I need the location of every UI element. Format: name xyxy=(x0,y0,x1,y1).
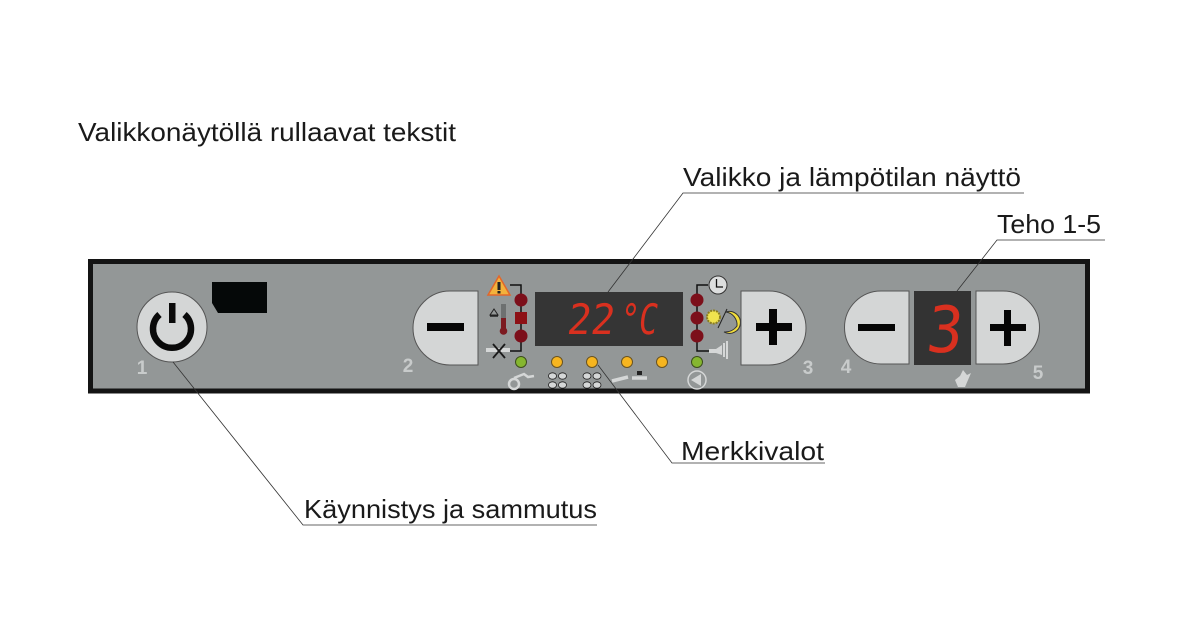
temperature display: 22 xyxy=(565,295,618,344)
icon: fan 1 xyxy=(548,373,566,388)
icon: sun and moon xyxy=(707,309,740,333)
button numbers: 1 xyxy=(137,358,148,379)
black indicator window xyxy=(212,282,267,313)
callout: indicator lights xyxy=(598,365,825,466)
callout: indicator lights: Merkkivalot xyxy=(681,436,825,466)
control panel xyxy=(90,262,1088,391)
button numbers: 3 xyxy=(803,358,813,379)
button numbers: 4 xyxy=(841,357,852,378)
button numbers xyxy=(137,356,1044,384)
button 5: plus xyxy=(976,291,1040,364)
icon: clock xyxy=(709,276,727,294)
callout: power level: Teho 1-5 xyxy=(997,209,1101,239)
temperature display: °C xyxy=(617,295,661,344)
button 2: minus xyxy=(413,291,478,365)
icon: valve cross xyxy=(486,344,510,358)
icon: flame xyxy=(955,370,971,387)
power level display: 3 xyxy=(923,293,967,368)
callout: start and stop xyxy=(173,362,597,525)
callout: start and stop: Käynnistys ja sammutus xyxy=(304,494,597,524)
temperature display xyxy=(535,292,683,346)
right status leds xyxy=(690,285,709,351)
icon: pump xyxy=(688,371,706,389)
title: Valikkonäytöllä rullaavat tekstit xyxy=(78,117,457,147)
button 4: minus xyxy=(844,291,909,364)
icon: flue fan xyxy=(509,374,534,389)
button numbers: 2 xyxy=(403,356,413,377)
callout: menu and temperature display xyxy=(608,162,1024,292)
callout: power level xyxy=(957,209,1105,291)
left status leds xyxy=(510,285,528,351)
icon: tap xyxy=(612,371,647,381)
button 3: plus xyxy=(741,291,806,365)
bottom indicator leds xyxy=(516,356,702,368)
power button xyxy=(137,292,207,362)
icon: thermometer xyxy=(490,304,507,335)
icon: warning triangle xyxy=(488,276,510,295)
icon: fan 2 xyxy=(583,373,601,388)
callout: menu and temperature display: Valikko ja lämpötilan näyttö xyxy=(683,162,1021,192)
button numbers: 5 xyxy=(1033,363,1044,384)
icon: horn xyxy=(709,341,727,359)
